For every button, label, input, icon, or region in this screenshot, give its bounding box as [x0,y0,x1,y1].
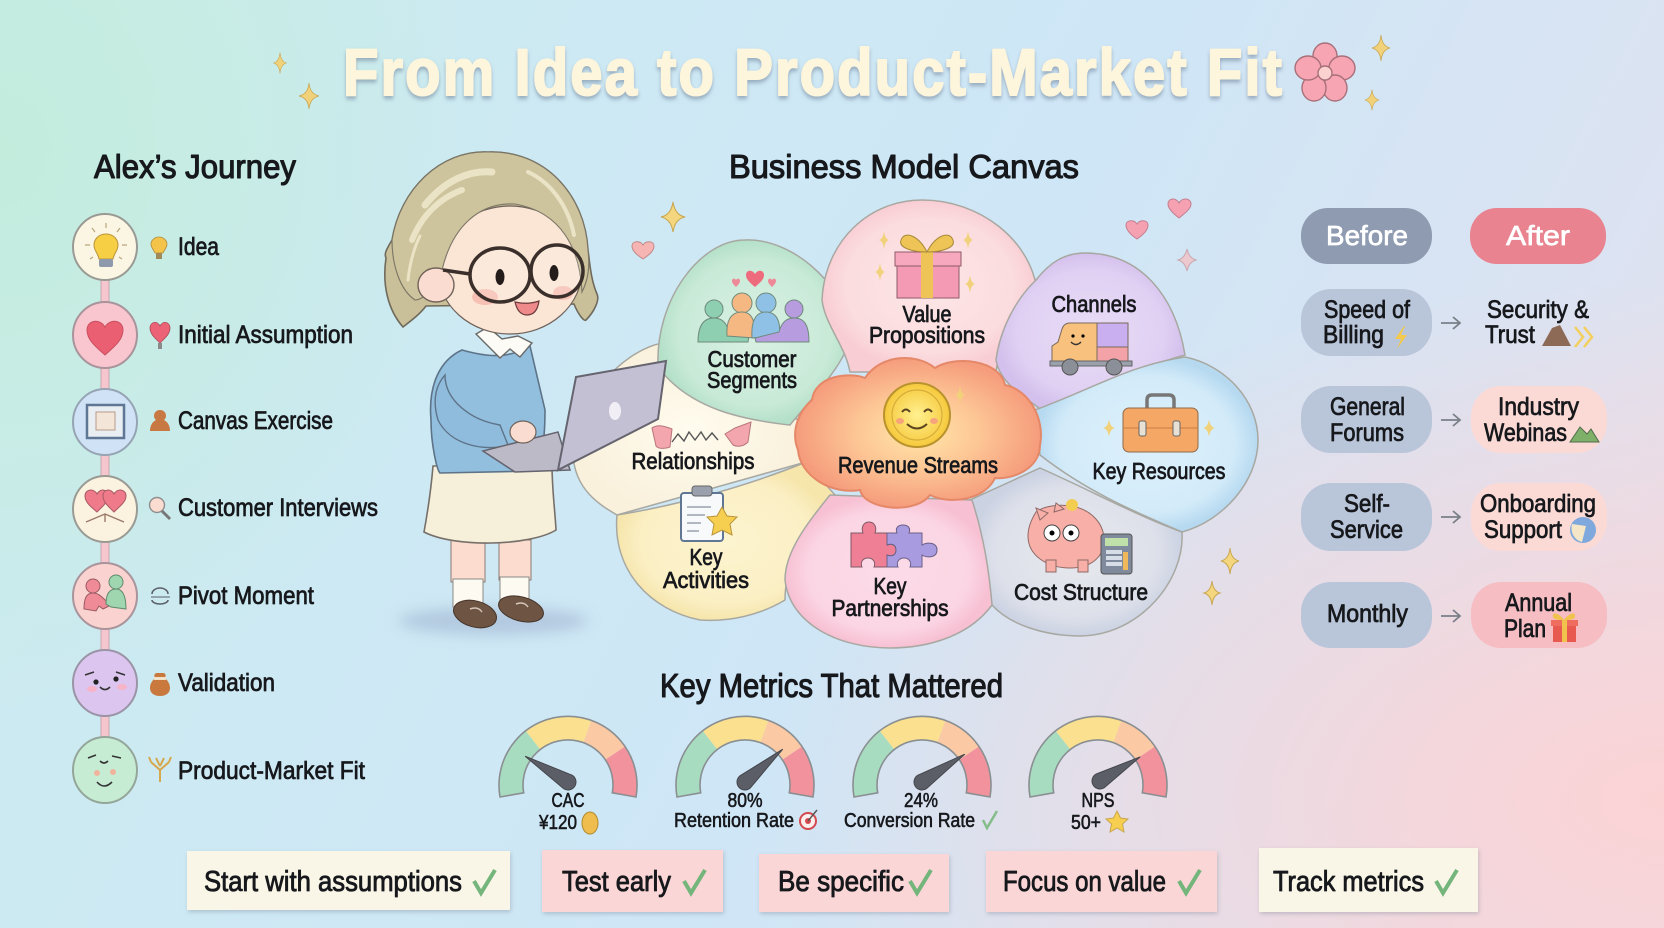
segment: Relationships [573,343,806,515]
segment: Customer Segments: Customer [708,346,797,372]
pill: Before header: Before [1326,220,1408,251]
illustration: Alex with laptop [385,152,666,635]
step: Canvas Exercise: Canvas Exercise [178,407,333,435]
pill: Before header [1301,208,1432,264]
row: Monthly to Annual Plan: Monthly [1327,600,1408,628]
note: Focus on value: Focus on value [1003,866,1166,898]
row: Speed of Billing to Security and Trust: Billing [1323,321,1384,349]
row: General Forums to Industry Webinars: Industry [1498,393,1579,421]
row: Monthly to Annual Plan: Plan [1504,615,1546,643]
segment: Key Activities: Key [690,544,723,570]
heading: Business Model Canvas: Business Model Canvas [729,148,1079,185]
gauge: Conversion Rate: 24% [904,790,938,812]
segment: Revenue Streams: Revenue Streams [838,452,998,478]
segment: Key Partnerships: Key [874,573,907,599]
gauge: NPS: NPS [1082,790,1114,812]
step: Idea [73,214,219,280]
step: Initial Assumption: Initial Assumption [178,321,353,349]
note: Focus on value [986,851,1217,912]
blush [472,286,573,305]
note: Test early [542,850,723,912]
heading: Alex's Journey: Alex’s Journey [94,148,296,185]
collar [476,327,532,358]
row: Speed of Billing to Security and Trust: Security & [1487,296,1589,324]
hair strands [408,172,574,280]
segment: Key Partnerships [785,495,992,648]
segment: Channels: Channels [1052,291,1136,317]
segment: Channels [996,253,1185,412]
hair back [385,152,598,327]
gauge: CAC: ¥120 [538,812,577,834]
segment: Key Resources: Key Resources [1092,458,1226,484]
segment: Key Activities [617,462,835,620]
row: Speed of Billing to Security and Trust: Trust [1485,321,1535,349]
segment: Relationships: Relationships [632,448,754,474]
row: General Forums to Industry Webinars: Webinas [1484,419,1567,447]
gauge: Retention Rate: 80% [728,790,763,812]
step: Canvas Exercise [73,389,333,455]
row: Self-Service to Onboarding Support: Service [1330,516,1403,544]
sparkles [274,35,1390,110]
segment: Cost Structure: Cost Structure [1014,579,1148,605]
segment: Cost Structure [970,468,1182,636]
gauge: Conversion Rate: Conversion Rate [844,810,975,832]
row: Self-Service to Onboarding Support: Onboarding [1480,490,1596,518]
legs and shoes [450,540,546,632]
skirt [424,464,556,543]
gauge: Retention Rate: Retention Rate [674,810,794,832]
step: Customer Interviews: Customer Interviews [178,494,378,522]
segment: Value Propositions: Value [902,301,952,327]
title text: From Idea to Product-Market Fit [343,37,1282,110]
step: Validation: Validation [178,669,275,697]
ground shadow [398,607,588,635]
segment: Key Partnerships: Partnerships [832,595,948,621]
arm [435,375,508,448]
heading: Key Metrics That Mattered: Key Metrics That Mattered [660,667,1003,704]
gauge: Conversion Rate [844,716,997,832]
row: General Forums to Industry Webinars [1301,386,1607,453]
segment: Value Propositions: Propositions [869,322,985,348]
face [438,206,582,334]
eyes and mouth [496,265,558,315]
note: Be specific: Be specific [778,866,904,898]
segment: Key Activities: Activities [663,567,749,593]
row: General Forums to Industry Webinars: General [1330,393,1405,421]
pill: After header: After [1506,220,1570,251]
panel: Alex's Journey [73,148,378,803]
step: Pivot Moment: Pivot Moment [178,582,314,610]
segment: Revenue Streams [795,358,1041,508]
note: Be specific [759,854,949,912]
gauge: CAC: CAC [552,790,584,812]
segment: Key Resources [1035,357,1258,532]
panel: takeaway notes [187,848,1478,912]
note: Test early: Test early [562,866,671,898]
ear [418,268,454,302]
icon: flower [1295,43,1355,101]
note: Track metrics: Track metrics [1273,866,1424,898]
step: Pivot Moment [73,563,314,629]
row: Self-Service to Onboarding Support: Self- [1344,490,1390,518]
segment: Value Propositions [822,200,1037,372]
gauge: Retention Rate [674,716,817,832]
step: Validation [73,650,275,716]
timeline connector [101,270,109,750]
step: Idea: Idea [178,233,219,261]
row: Monthly to Annual Plan: Annual [1505,589,1572,617]
row: General Forums to Industry Webinars: Forums [1330,419,1404,447]
step: Customer Interviews [73,476,378,542]
row: Monthly to Annual Plan [1301,582,1607,648]
panel: Before and After [1301,208,1607,648]
glasses [443,245,583,302]
hand [510,421,536,443]
canvas decorations [632,199,1239,605]
note: Start with assumptions: Start with assumptions [204,866,462,898]
row: Speed of Billing to Security and Trust [1301,289,1592,356]
step: Product-Market Fit: Product-Market Fit [178,757,365,785]
gauge: CAC [499,716,637,834]
note: Track metrics [1259,848,1478,912]
segment: Customer Segments: Segments [707,367,797,393]
panel: canvas [573,148,1258,648]
segment: Customer Segments [658,240,852,425]
row: Self-Service to Onboarding Support: Support [1484,516,1562,544]
step: Initial Assumption [73,302,353,368]
gauge: NPS: 50+ [1071,812,1101,834]
hair front [392,152,589,300]
step: Product-Market Fit [73,737,365,803]
pill: After header [1470,208,1606,264]
gauge: NPS [1029,716,1167,834]
title [274,35,1390,110]
row: Self-Service to Onboarding Support [1301,483,1607,551]
laptop [483,361,666,472]
row: Speed of Billing to Security and Trust: Speed of [1324,296,1410,324]
sweater [431,346,545,473]
note: Start with assumptions [187,851,510,910]
panel: Key Metrics [499,667,1167,834]
